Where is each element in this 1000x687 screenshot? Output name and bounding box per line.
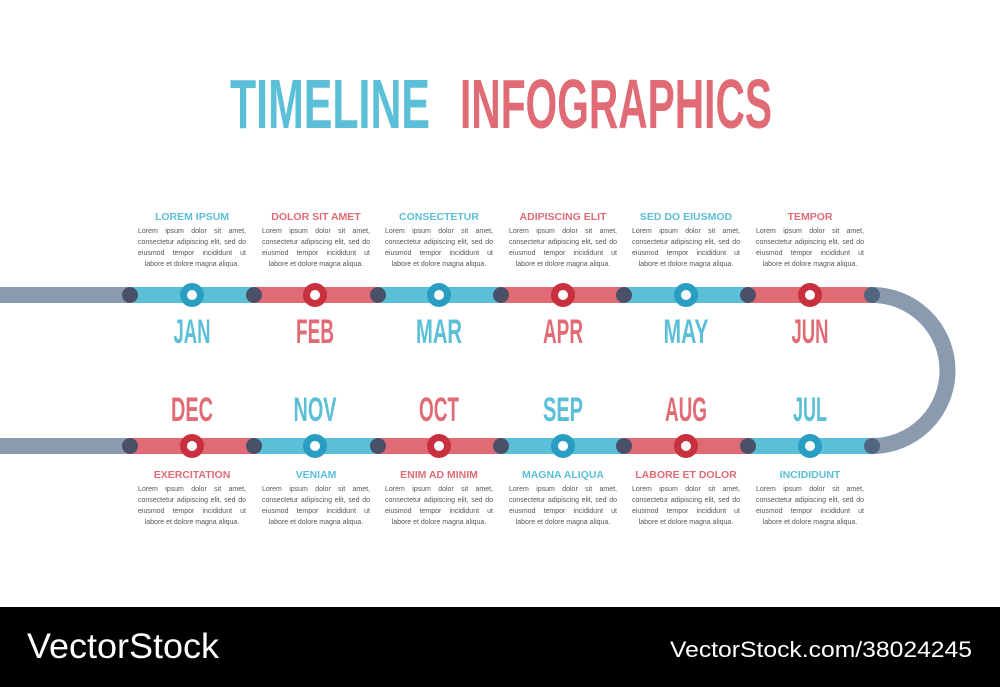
month labels: JUL (793, 391, 827, 429)
text block: consectetur: CONSECTETUR (399, 211, 479, 223)
text block: magna aliqua: Lorem ipsum dolor sit amet, consectetur adipiscing elit, sed do eiusmod tempor incididunt ut labore et dolore magna aliqua. (509, 486, 617, 526)
text block: sed do eiusmod: Lorem ipsum dolor sit amet, consectetur adipiscing elit, sed do eiusmod tempor incididunt ut labore et dolore magna aliqua. (632, 228, 740, 268)
title: INFOGRAPHICS (460, 65, 772, 143)
footer bar: VectorStock.com/38024245 (670, 637, 972, 662)
month labels: JAN (174, 313, 210, 351)
month markers (184, 286, 818, 454)
month labels: MAR (416, 313, 462, 351)
text block: lorem ipsum: Lorem ipsum dolor sit amet, consectetur adipiscing elit, sed do eiusmod tempor incididunt ut labore et dolore magna aliqua. (138, 228, 246, 268)
month labels: APR (543, 313, 583, 351)
text block: veniam: VENIAM (296, 469, 336, 481)
text block: dolor sit amet: Lorem ipsum dolor sit amet, consectetur adipiscing elit, sed do eiusmod tempor incididunt ut labore et dolore magna aliqua. (262, 228, 370, 268)
text block: labore et dolor: Lorem ipsum dolor sit amet, consectetur adipiscing elit, sed do eiusmod tempor incididunt ut labore et dolore magna aliqua. (632, 486, 740, 526)
text block: enim ad minim: ENIM AD MINIM (400, 469, 478, 481)
month labels (171, 313, 828, 429)
text block: labore et dolor: LABORE ET DOLOR (635, 469, 737, 481)
footer bar: VectorStock (27, 627, 220, 666)
month labels: AUG (665, 391, 707, 429)
month labels: MAY (664, 313, 709, 351)
text block: lorem ipsum: LOREM IPSUM (155, 211, 229, 223)
text block: adipiscing elit: ADIPISCING ELIT (520, 211, 606, 223)
footer bar (0, 607, 1000, 687)
text block: tempor: TEMPOR (788, 211, 832, 223)
month labels: NOV (294, 391, 337, 429)
text block: adipiscing elit: Lorem ipsum dolor sit amet, consectetur adipiscing elit, sed do eiusmod tempor incididunt ut labore et dolore magna aliqua. (509, 228, 617, 268)
text block: tempor: Lorem ipsum dolor sit amet, consectetur adipiscing elit, sed do eiusmod tempor incididunt ut labore et dolore magna aliqua. (756, 228, 864, 268)
text block: enim ad minim: Lorem ipsum dolor sit amet, consectetur adipiscing elit, sed do eiusmod tempor incididunt ut labore et dolore magna aliqua. (385, 486, 493, 526)
month labels: DEC (171, 391, 213, 429)
title: TIMELINE (230, 65, 430, 143)
month labels: FEB (296, 313, 334, 351)
connector dots (122, 287, 880, 454)
text block: incididunt: Lorem ipsum dolor sit amet, consectetur adipiscing elit, sed do eiusmod tempor incididunt ut labore et dolore magna aliqua. (756, 486, 864, 526)
text block: veniam: Lorem ipsum dolor sit amet, consectetur adipiscing elit, sed do eiusmod tempor incididunt ut labore et dolore magna aliqua. (262, 486, 370, 526)
text block: exercitation: Lorem ipsum dolor sit amet, consectetur adipiscing elit, sed do eiusmod tempor incididunt ut labore et dolore magna aliqua. (138, 486, 246, 526)
text block: incididunt: INCIDIDUNT (780, 469, 840, 481)
text block: consectetur: Lorem ipsum dolor sit amet, consectetur adipiscing elit, sed do eiusmod tempor incididunt ut labore et dolore magna aliqua. (385, 228, 493, 268)
month labels: SEP (543, 391, 583, 429)
text block: magna aliqua: MAGNA ALIQUA (522, 469, 604, 481)
month labels: JUN (792, 313, 828, 351)
text block: dolor sit amet: DOLOR SIT AMET (271, 211, 361, 223)
timeline track (0, 295, 948, 446)
text block: exercitation: EXERCITATION (154, 469, 230, 481)
month labels: OCT (419, 391, 459, 429)
title (230, 65, 772, 143)
text block: sed do eiusmod: SED DO EIUSMOD (640, 211, 732, 223)
